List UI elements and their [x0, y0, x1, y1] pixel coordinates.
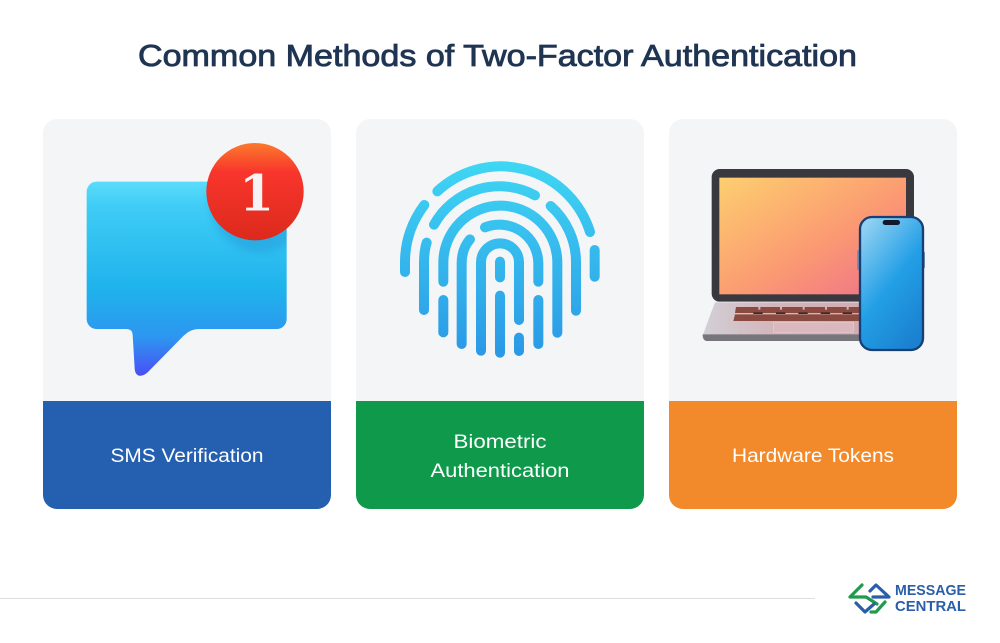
panel footer: biometric authentication: Biometric	[454, 431, 547, 453]
icon: fingerprint	[405, 166, 595, 353]
icon: message bubble with notification badge	[87, 143, 310, 376]
footer rule	[0, 598, 815, 599]
panel footer: hardware tokens	[669, 401, 957, 509]
phone	[857, 217, 925, 350]
logo: Message Central: CENTRAL	[895, 598, 966, 615]
panel footer: SMS verification: SMS Verification	[110, 445, 264, 467]
panel: SMS verification	[43, 119, 331, 509]
logo mark	[850, 585, 889, 612]
panel footer: SMS verification	[43, 401, 331, 509]
panel footer: hardware tokens: Hardware Tokens	[732, 445, 894, 467]
icon: laptop and phone	[703, 169, 925, 350]
icon: message bubble with notification badge: 1	[239, 164, 274, 223]
panel: biometric authentication	[356, 119, 644, 509]
panel footer: biometric authentication: Authentication	[430, 460, 570, 482]
panel: hardware tokens	[669, 119, 957, 509]
logo wordmark: MESSAGE	[895, 582, 966, 599]
panel footer: biometric authentication	[356, 401, 644, 509]
logo: Message Central	[850, 582, 966, 615]
title: Common Methods of Two-Factor Authentication	[138, 38, 857, 73]
laptop screen	[712, 169, 914, 302]
laptop base	[703, 302, 903, 341]
